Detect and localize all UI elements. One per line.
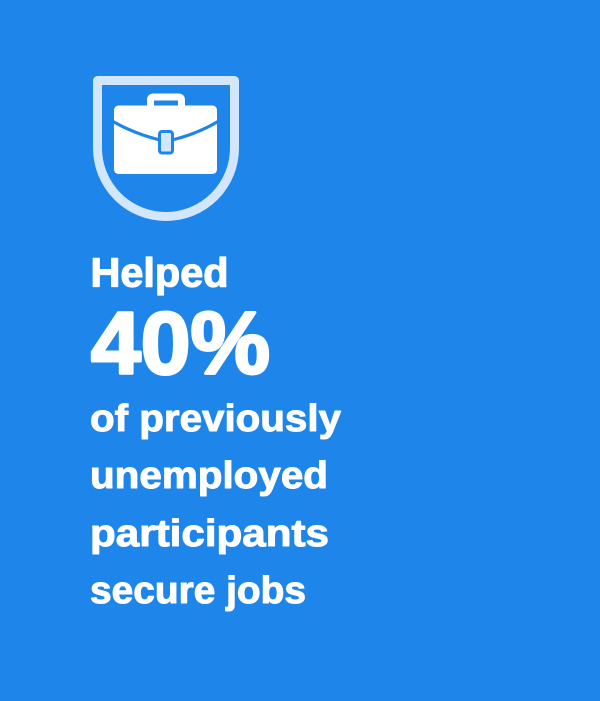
line: unemployed: unemployed bbox=[90, 455, 328, 497]
line: of previously: of previously bbox=[90, 398, 341, 440]
briefcase clasp bbox=[160, 132, 172, 153]
line: participants: participants bbox=[90, 513, 329, 555]
icon: shield with briefcase bbox=[98, 80, 234, 216]
briefcase handle bbox=[150, 97, 182, 107]
icon: shield outline bbox=[98, 80, 234, 216]
text block: description bbox=[90, 398, 341, 612]
line: secure jobs: secure jobs bbox=[90, 570, 306, 612]
briefcase flap line bbox=[113, 122, 218, 140]
briefcase body bbox=[114, 106, 217, 174]
big number: 40%: 40% bbox=[91, 294, 270, 392]
heading: Helped: Helped bbox=[90, 250, 228, 296]
icon: briefcase bbox=[113, 97, 218, 174]
